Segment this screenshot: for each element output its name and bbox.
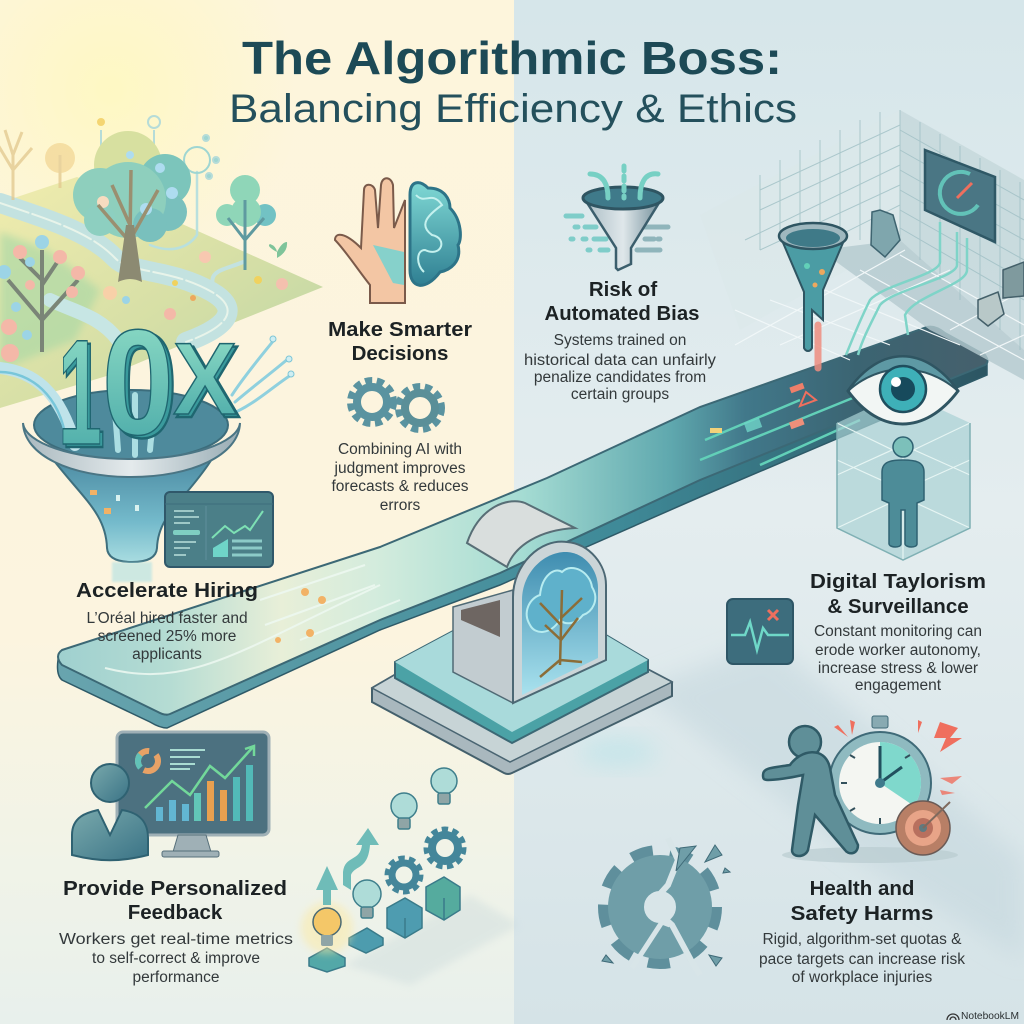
text: provide personalized feedback: Feedback: [128, 901, 223, 924]
icon: pulse monitor: [727, 599, 793, 664]
text: health and safety harms: pace targets can increase risk: [759, 951, 965, 968]
teal bulbs: [353, 768, 457, 918]
funnel front rim: [23, 423, 240, 477]
text: make smarter decisions body: forecasts & reduces: [332, 478, 469, 495]
10X depth: 1: [61, 311, 105, 479]
illustration: gauge panel and data streams: [846, 150, 995, 355]
title: Balancing Efficiency & Ethics: [229, 87, 797, 131]
text: digital taylorism: [810, 570, 986, 694]
text: digital taylorism: Digital Taylorism: [810, 570, 986, 593]
funnel with 10X number: [0, 298, 294, 582]
text: accelerate hiring: [76, 579, 258, 663]
top cylinder: [467, 501, 575, 567]
tree in pedestal: [540, 590, 582, 677]
falling particles: [90, 490, 139, 514]
icon: worker racing a stopwatch: [763, 716, 962, 863]
10X face: 1: [58, 308, 102, 476]
circuit nodes: [97, 116, 219, 179]
text: provide personalized feedback: Provide Personalized: [63, 877, 287, 900]
brain: [410, 183, 460, 285]
upper glass plate: [395, 590, 648, 743]
10X face: X: [173, 322, 237, 436]
text: provide personalized feedback: [59, 877, 293, 986]
text: make smarter decisions heading: [328, 318, 472, 365]
pillar side: [453, 590, 513, 703]
big tree: [73, 131, 191, 282]
text: accelerate hiring: L’Oréal hired faster and: [86, 610, 248, 627]
alarm sparks: [834, 720, 962, 795]
title: The Algorithmic Boss:: [242, 32, 782, 84]
text: make smarter decisions body: Combining AI with: [338, 441, 462, 458]
target: [896, 801, 950, 855]
fulcrum: cylinder and tree-brain arch: [467, 501, 606, 703]
person: [91, 764, 129, 802]
person: [882, 437, 924, 547]
10X depth: 0: [106, 301, 178, 469]
title: [229, 32, 797, 131]
10X face: [58, 298, 237, 476]
monitor: [117, 732, 269, 835]
eye: [848, 356, 958, 424]
watermark: NotebookLM: NotebookLM: [961, 1011, 1019, 1022]
person: [763, 726, 858, 856]
yellow bulb: [301, 902, 353, 954]
stopwatch: [829, 716, 931, 834]
text: accelerate hiring: screened 25% more: [98, 628, 236, 645]
text: health and safety harms: of workplace injuries: [792, 969, 932, 986]
text: make smarter decisions body: judgment improves: [334, 460, 466, 477]
blue flow streams: [0, 336, 294, 455]
pale background trees: [0, 130, 75, 200]
text: make smarter decisions heading: Make Smarter: [328, 318, 472, 341]
icon: twin gears: [351, 381, 441, 429]
text: risk of automated bias: certain groups: [571, 386, 669, 403]
text: accelerate hiring: applicants: [132, 646, 202, 663]
illustration: surveillance wall grid and floor: [700, 110, 1024, 380]
text: digital taylorism: increase stress & lower: [818, 660, 978, 677]
eye and glass cube: [837, 356, 970, 560]
text: risk of automated bias: Automated Bias: [544, 302, 700, 325]
streams: [0, 172, 243, 342]
icon: worker and dashboard monitor: [72, 732, 269, 860]
soft floor shadow: [345, 895, 520, 985]
blocks: [309, 877, 460, 972]
illustration: growing landscape with trees: [0, 116, 323, 408]
text: health and safety harms: Health and: [810, 877, 914, 900]
gears: [388, 830, 463, 891]
right beam data flows: [700, 383, 860, 465]
text: health and safety harms: [759, 877, 965, 986]
flowers: [103, 251, 288, 320]
icon: hand and brain: [335, 178, 460, 303]
left beam data flows: [105, 565, 400, 674]
text: risk of automated bias: Systems trained on: [554, 332, 686, 349]
text: digital taylorism: engagement: [855, 677, 942, 694]
dashboard icon: [165, 492, 273, 567]
funnel body: [55, 462, 210, 562]
icon: bulbs, gears and growth blocks: [301, 768, 520, 985]
text: risk of automated bias: historical data can unfairly: [524, 352, 716, 369]
text: risk of automated bias: Risk of: [589, 278, 657, 301]
icon: broken gear: [602, 838, 730, 975]
icon: bias funnel: [566, 166, 668, 270]
brain outline: [527, 568, 595, 632]
lower base plate: [372, 602, 672, 774]
hand: [335, 178, 405, 303]
text: provide personalized feedback: Workers get real-time metrics: [59, 931, 293, 948]
text: provide personalized feedback: to self-correct & improve: [92, 950, 260, 967]
text: provide personalized feedback: performance: [132, 969, 220, 986]
seesaw beam: [58, 327, 988, 728]
bias funnel on the beam: [779, 223, 847, 368]
text: digital taylorism: Constant monitoring can: [814, 623, 982, 640]
small tree: [216, 175, 287, 270]
text: digital taylorism: & Surveillance: [827, 595, 969, 618]
text: digital taylorism: erode worker autonomy,: [815, 642, 981, 659]
text: risk of automated bias: [524, 278, 716, 403]
text: health and safety harms: Safety Harms: [790, 902, 934, 925]
text: make smarter decisions body: [332, 441, 469, 514]
falling light below funnel: [112, 562, 152, 582]
10X face: 0: [102, 298, 174, 466]
arch front frame: [513, 542, 606, 703]
flowering tree: [0, 235, 85, 362]
10X depth: X: [176, 325, 240, 439]
text: make smarter decisions body: errors: [380, 497, 420, 514]
glowing arch panel: [522, 552, 598, 695]
text: risk of automated bias: penalize candidates from: [534, 369, 706, 386]
arrows: [316, 828, 379, 905]
seesaw fulcrum base: [372, 590, 672, 774]
rock and crates: [871, 210, 900, 257]
text: health and safety harms: Rigid, algorithm-set quotas &: [762, 931, 962, 948]
text: make smarter decisions heading: Decisions: [352, 342, 448, 365]
text: accelerate hiring: Accelerate Hiring: [76, 579, 258, 602]
funnel interior: [34, 390, 228, 460]
10X depth: [61, 301, 240, 479]
glass cube: [837, 392, 970, 560]
